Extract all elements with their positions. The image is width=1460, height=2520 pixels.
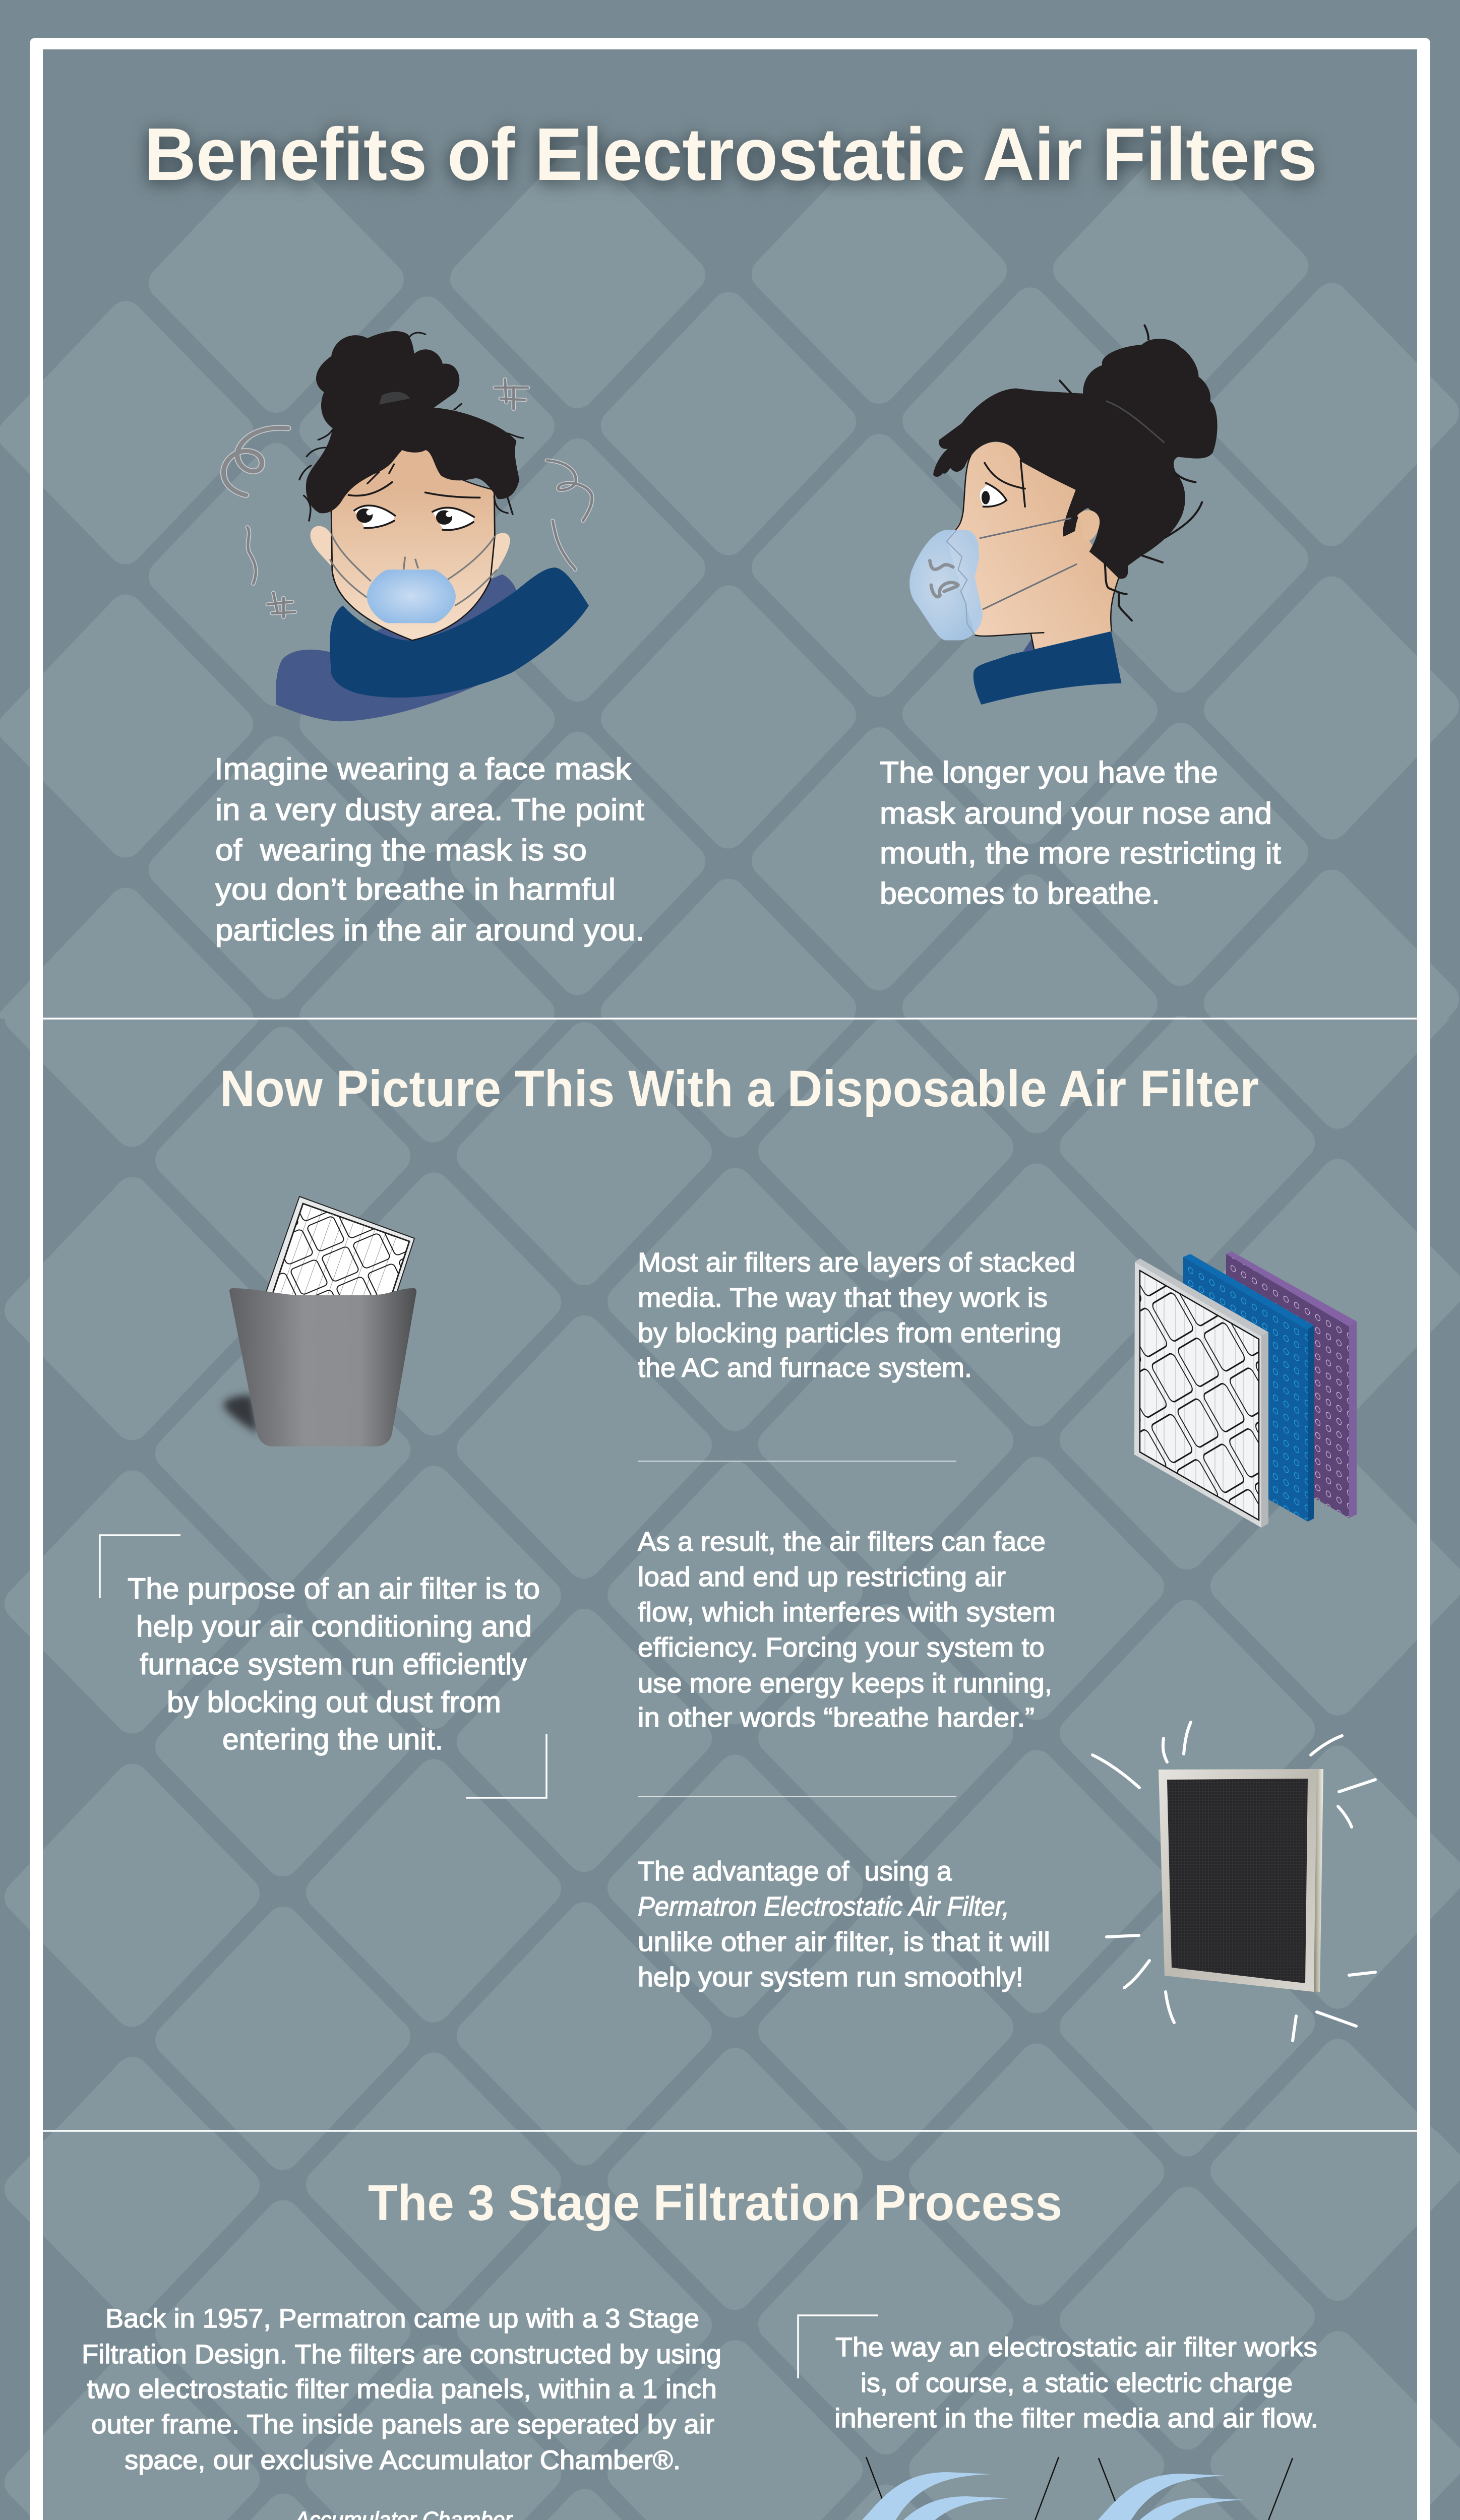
filter side: [1313, 1769, 1323, 1992]
text: as a result: As a result, the air filters can face: [638, 1527, 1046, 1557]
filter mesh: [1167, 1779, 1308, 1983]
illustration: woman in profile with mask: [909, 326, 1218, 705]
callout text: entering the unit.: [222, 1723, 443, 1756]
heading: disposable air filter: Now Picture This With a Disposable Air Filter: [220, 1060, 1259, 1117]
eyes: [354, 506, 474, 530]
text: longer you have the mask: The longer you have the: [880, 755, 1218, 789]
callout text: by blocking out dust from: [167, 1686, 501, 1719]
callout text: is, of course, a static electric charge: [861, 2368, 1293, 2398]
callout text: [128, 1572, 540, 1756]
discarded filter: [266, 1195, 415, 1295]
bracket bottom right: [466, 1734, 546, 1798]
background diamond pattern: section 3: [0, 2131, 1460, 2520]
text: the advantage: help your system run smoothly!: [638, 1962, 1023, 1992]
text: imagine wearing a mask: particles in the air around you.: [215, 913, 644, 947]
text: most air filters: [638, 1247, 1075, 1383]
text: back in 1957: space, our exclusive Accumulator Chamber®.: [125, 2445, 681, 2475]
bracket top left: [100, 1535, 180, 1598]
icon: permatron electrostatic filter with rays: [1092, 1722, 1375, 2041]
text: as a result: in other words “breathe harder.”: [638, 1703, 1035, 1733]
text: longer you have the mask: [880, 755, 1281, 910]
diagram: charges and air flow: [759, 2457, 1293, 2520]
text: the advantage: [638, 1856, 1050, 1992]
pleated front filter: [1134, 1258, 1268, 1528]
ears: [311, 526, 510, 580]
text: back in 1957: two electrostatic filter media panels, within a 1 inch: [87, 2374, 717, 2404]
text: imagine wearing a mask: of wearing the mask is so: [215, 833, 587, 867]
callout text: furnace system run efficiently: [140, 1648, 527, 1681]
text: back in 1957: [82, 2304, 721, 2475]
face mask: [367, 570, 456, 623]
text: imagine wearing a mask: you don’t breathe in harmful: [215, 872, 616, 906]
section dividers: [43, 1019, 1417, 2131]
text: as a result: [638, 1527, 1056, 1733]
scarf front: [330, 568, 589, 698]
callout text: [834, 2333, 1318, 2433]
can shadow: [223, 1395, 258, 1434]
hair: [933, 339, 1218, 579]
callout: purpose of an air filter: [100, 1535, 546, 1798]
purple layer: [1226, 1251, 1357, 1518]
hair strands: [1060, 326, 1202, 620]
breath swirls: [930, 560, 958, 597]
collar: [974, 632, 1121, 705]
face and neck: [947, 442, 1119, 649]
eye: [980, 484, 1007, 506]
text: imagine wearing a mask: in a very dusty area. The point: [215, 793, 644, 827]
scarf back: [276, 574, 516, 721]
title: Benefits of Electrostatic Air Filters: [144, 113, 1317, 196]
text: the advantage: Permatron Electrostatic Air Filter,: [638, 1892, 1009, 1922]
callout text: The purpose of an air filter is to: [128, 1572, 540, 1605]
text: most air filters: Most air filters are layers of stacked: [638, 1247, 1075, 1278]
text: back in 1957: outer frame. The inside panels are seperated by air: [91, 2410, 714, 2439]
nose and mask straps: [330, 534, 497, 606]
text: most air filters: the AC and furnace system.: [638, 1353, 972, 1383]
face: [331, 449, 495, 641]
text: most air filters: media. The way that they work is: [638, 1283, 1048, 1313]
text: longer you have the mask: becomes to breathe.: [880, 876, 1160, 910]
hanging threads: [866, 2457, 1293, 2520]
motion rays: [1092, 1722, 1375, 2041]
background diamond pattern: section 1: [0, 136, 1459, 1019]
ear: [1077, 510, 1100, 541]
air flow swooshes: [759, 2472, 1245, 2520]
text: back in 1957: Back in 1957, Permatron came up with a 3 Stage: [105, 2304, 699, 2334]
icon: stacked filter media layers: [1134, 1251, 1357, 1528]
callout text: The way an electrostatic air filter works: [835, 2333, 1317, 2362]
hair: [306, 331, 519, 513]
blue layer: [1183, 1254, 1314, 1522]
heading: 3 stage filtration process: The 3 Stage Filtration Process: [368, 2175, 1062, 2231]
filter frame: [1159, 1769, 1317, 1992]
text: most air filters: by blocking particles from entering: [638, 1318, 1061, 1348]
background diamond pattern: section 2: [0, 1019, 1460, 2131]
text: the advantage: The advantage of using a: [638, 1856, 952, 1886]
text: as a result: load and end up restricting air: [638, 1562, 1006, 1592]
text: as a result: flow, which interferes with system: [638, 1597, 1056, 1627]
text: longer you have the mask: mask around your nose and: [880, 796, 1272, 830]
text: imagine wearing a mask: [214, 752, 644, 947]
text: as a result: efficiency. Forcing your system to: [638, 1632, 1045, 1663]
callout text: inherent in the filter media and air flow.: [834, 2404, 1318, 2433]
trash can: [229, 1288, 416, 1446]
mask straps: [980, 518, 1077, 609]
face mask in profile: [909, 530, 983, 641]
text: as a result: use more energy keeps it running,: [638, 1668, 1052, 1698]
hair tie: [379, 392, 410, 405]
text: longer you have the mask: mouth, the more restricting it: [880, 836, 1281, 870]
text: the advantage: unlike other air filter, is that it will: [638, 1927, 1050, 1957]
illustration: woman facing front with mask and dust: [223, 331, 592, 721]
dust swirls: [223, 380, 592, 617]
stray hairs: [299, 333, 523, 521]
text: imagine wearing a mask: Imagine wearing a face mask: [214, 752, 632, 786]
text: back in 1957: Filtration Design. The filters are constructed by using: [82, 2340, 721, 2369]
icon: filter in trash can: [223, 1194, 418, 1446]
callout: the way an electrostatic filter works: [798, 2315, 1318, 2433]
bracket top left: [798, 2315, 878, 2378]
profile outline: [955, 455, 1119, 649]
callout text: help your air conditioning and: [136, 1610, 532, 1643]
